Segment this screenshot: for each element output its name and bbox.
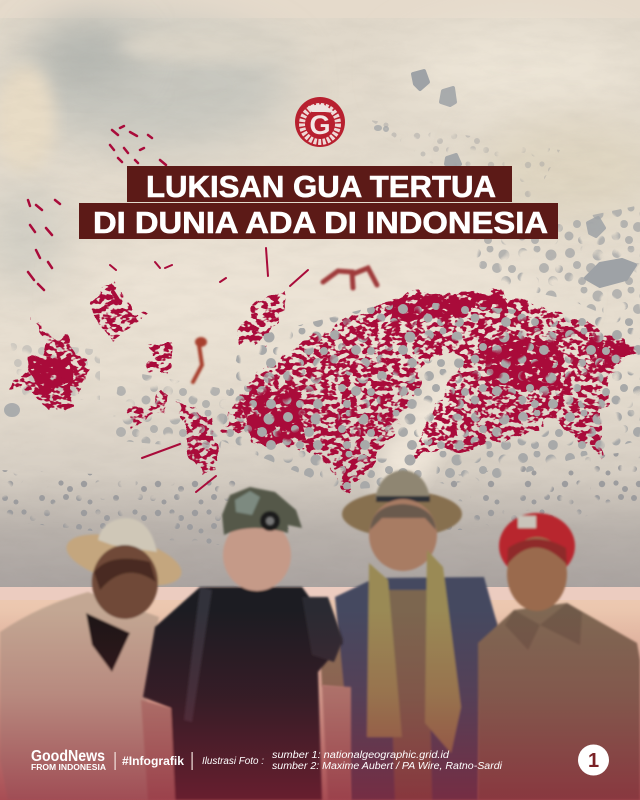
dense painted patches bbox=[30, 290, 636, 445]
painted lower left limbs bbox=[128, 390, 170, 430]
person 4: man in red helmet bbox=[478, 513, 640, 800]
GoodNews brand bbox=[31, 748, 106, 772]
logo badge bbox=[295, 97, 345, 147]
hashtag: #Infografik bbox=[122, 756, 185, 768]
GoodNews brand: FROM INDONESIA bbox=[31, 763, 106, 772]
source 2: sumber 2: Maxime Aubert / PA Wire, Ratno-Sardi bbox=[272, 761, 503, 772]
source 1: sumber 1: nationalgeographic.grid.id bbox=[272, 750, 449, 761]
title bbox=[79, 166, 558, 240]
painted central figure bbox=[236, 290, 288, 345]
photo credit label: Ilustrasi Foto : bbox=[202, 756, 264, 767]
background: rock wall photo bbox=[0, 18, 640, 588]
lower pink wall band bbox=[0, 587, 640, 800]
painted left animal bbox=[10, 316, 92, 415]
page number badge: 1 bbox=[588, 750, 599, 772]
title bar 2 bbox=[79, 203, 558, 239]
cave painting: red figures bbox=[10, 285, 638, 494]
person 3: man in wide hat and scarf bbox=[320, 470, 500, 800]
scarf bbox=[367, 550, 461, 753]
GoodNews brand: GoodNews bbox=[31, 748, 105, 765]
grey dots over the painting bbox=[110, 300, 640, 490]
title line 2: DI DUNIA ADA DI INDONESIA bbox=[93, 206, 548, 240]
title line 1: LUKISAN GUA TERTUA bbox=[146, 170, 496, 204]
logo letter: G bbox=[309, 110, 331, 140]
grey dot speckle around painting bbox=[0, 120, 640, 545]
painted boar body bbox=[222, 290, 638, 494]
small painted specks and strokes bbox=[28, 126, 308, 492]
page number badge bbox=[578, 744, 609, 776]
bottom red gradient overlay bbox=[0, 610, 640, 800]
top beige band bbox=[0, 0, 640, 19]
person 2: man in caving helmet bbox=[141, 487, 351, 800]
footer bbox=[31, 748, 503, 772]
ochre painted motif bbox=[193, 268, 377, 382]
person 1: man in straw hat bbox=[0, 518, 187, 800]
title bar 1 bbox=[127, 166, 512, 202]
grey stone blobs bbox=[6, 71, 635, 415]
painted upper left marks bbox=[90, 285, 145, 340]
